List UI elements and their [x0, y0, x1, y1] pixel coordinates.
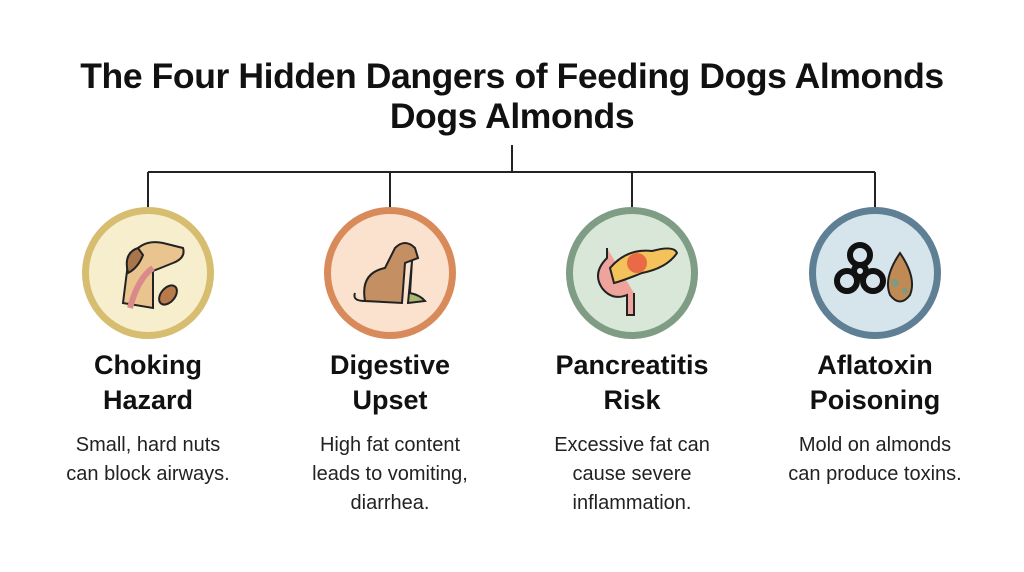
text: diarrhea.	[351, 492, 429, 514]
icon: biohazard and moldy almond	[809, 207, 941, 339]
title	[80, 56, 944, 136]
text: cause severe	[573, 463, 691, 485]
heading: Pancreatitis	[555, 350, 709, 380]
heading: Risk	[603, 385, 661, 415]
heading: Aflatoxin	[817, 350, 933, 380]
text: Excessive fat can	[554, 434, 710, 456]
text: Small, hard nuts	[76, 434, 220, 456]
text	[66, 434, 230, 485]
heading: Upset	[352, 385, 428, 415]
heading: Digestive	[330, 350, 450, 380]
title: The Four Hidden Dangers of Feeding Dogs Almonds	[80, 56, 944, 96]
panel: pancreatitis	[554, 207, 710, 514]
text: inflammation.	[573, 492, 691, 514]
icon: sick dog	[324, 207, 456, 339]
heading: Choking	[94, 350, 202, 380]
panel: choking hazard	[66, 207, 230, 485]
text	[788, 434, 962, 485]
text: can block airways.	[66, 463, 230, 485]
panel: digestive upset	[312, 207, 468, 514]
heading: Poisoning	[810, 385, 940, 415]
text: High fat content	[320, 434, 460, 456]
heading	[330, 350, 450, 415]
text: can produce toxins.	[788, 463, 962, 485]
heading: Hazard	[103, 385, 193, 415]
panel: aflatoxin	[788, 207, 962, 485]
icon: choking dog	[82, 207, 214, 339]
title: Dogs Almonds	[390, 96, 634, 136]
text	[312, 434, 468, 514]
icon: pancreas	[566, 207, 698, 339]
text: leads to vomiting,	[312, 463, 468, 485]
text: Mold on almonds	[799, 434, 951, 456]
heading	[810, 350, 940, 415]
text	[554, 434, 710, 514]
heading	[555, 350, 709, 415]
heading	[94, 350, 202, 415]
